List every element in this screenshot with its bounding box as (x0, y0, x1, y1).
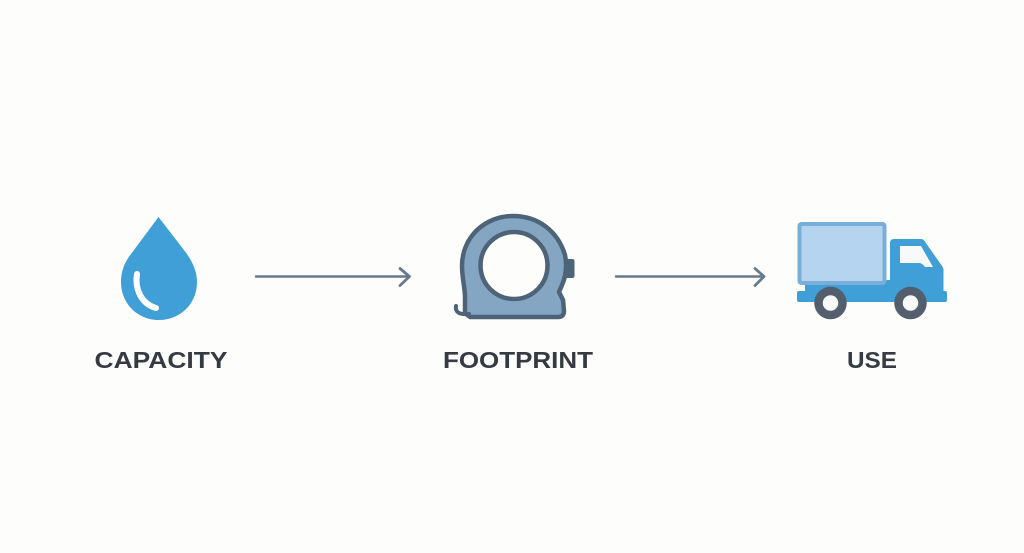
label: capacity: CAPACITY (94, 347, 228, 373)
icon: delivery truck (797, 224, 947, 315)
icon: tape measure (456, 216, 574, 317)
arrow: capacity to footprint (256, 268, 410, 286)
label: footprint: FOOTPRINT (443, 347, 593, 373)
label: use: USE (847, 347, 897, 373)
arrow: footprint to use (616, 268, 764, 286)
icon: water drop (121, 217, 197, 320)
